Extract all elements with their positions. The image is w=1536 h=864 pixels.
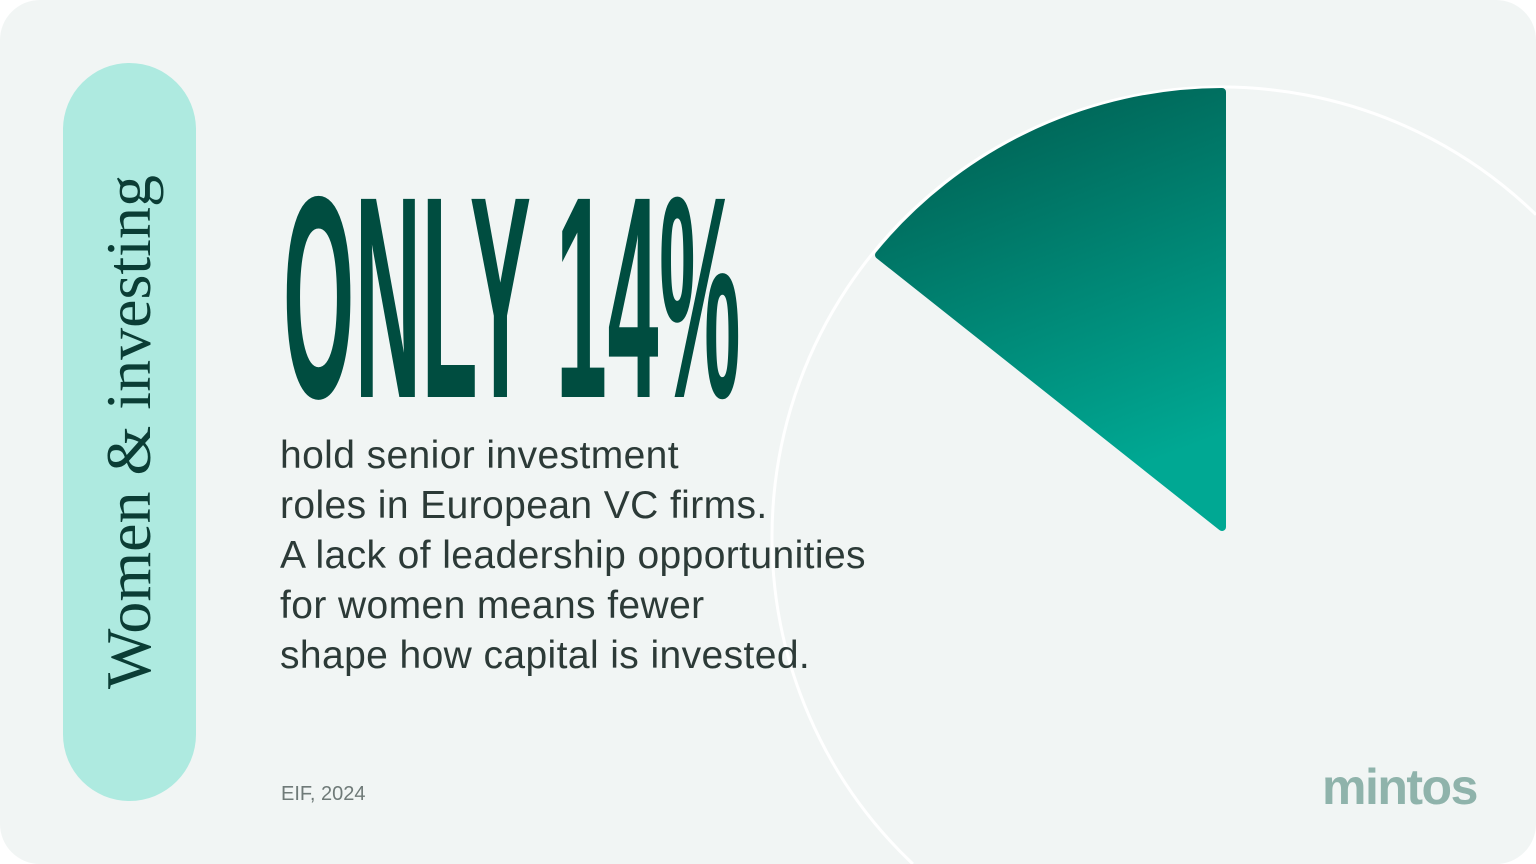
vertical heading: Women & investing [93,175,164,689]
description text: for women means fewer [280,584,705,627]
description text: A lack of leadership opportunities [280,534,866,577]
logo: mintos [1322,759,1477,815]
description text: shape how capital is invested. [280,634,810,677]
description text: hold senior investment [280,434,679,477]
side pill label [63,63,196,801]
description text [280,434,866,677]
source: EIF, 2024 [281,783,366,805]
description text: roles in European VC firms. [280,484,768,527]
headline stat: ONLY 14% [283,137,741,459]
